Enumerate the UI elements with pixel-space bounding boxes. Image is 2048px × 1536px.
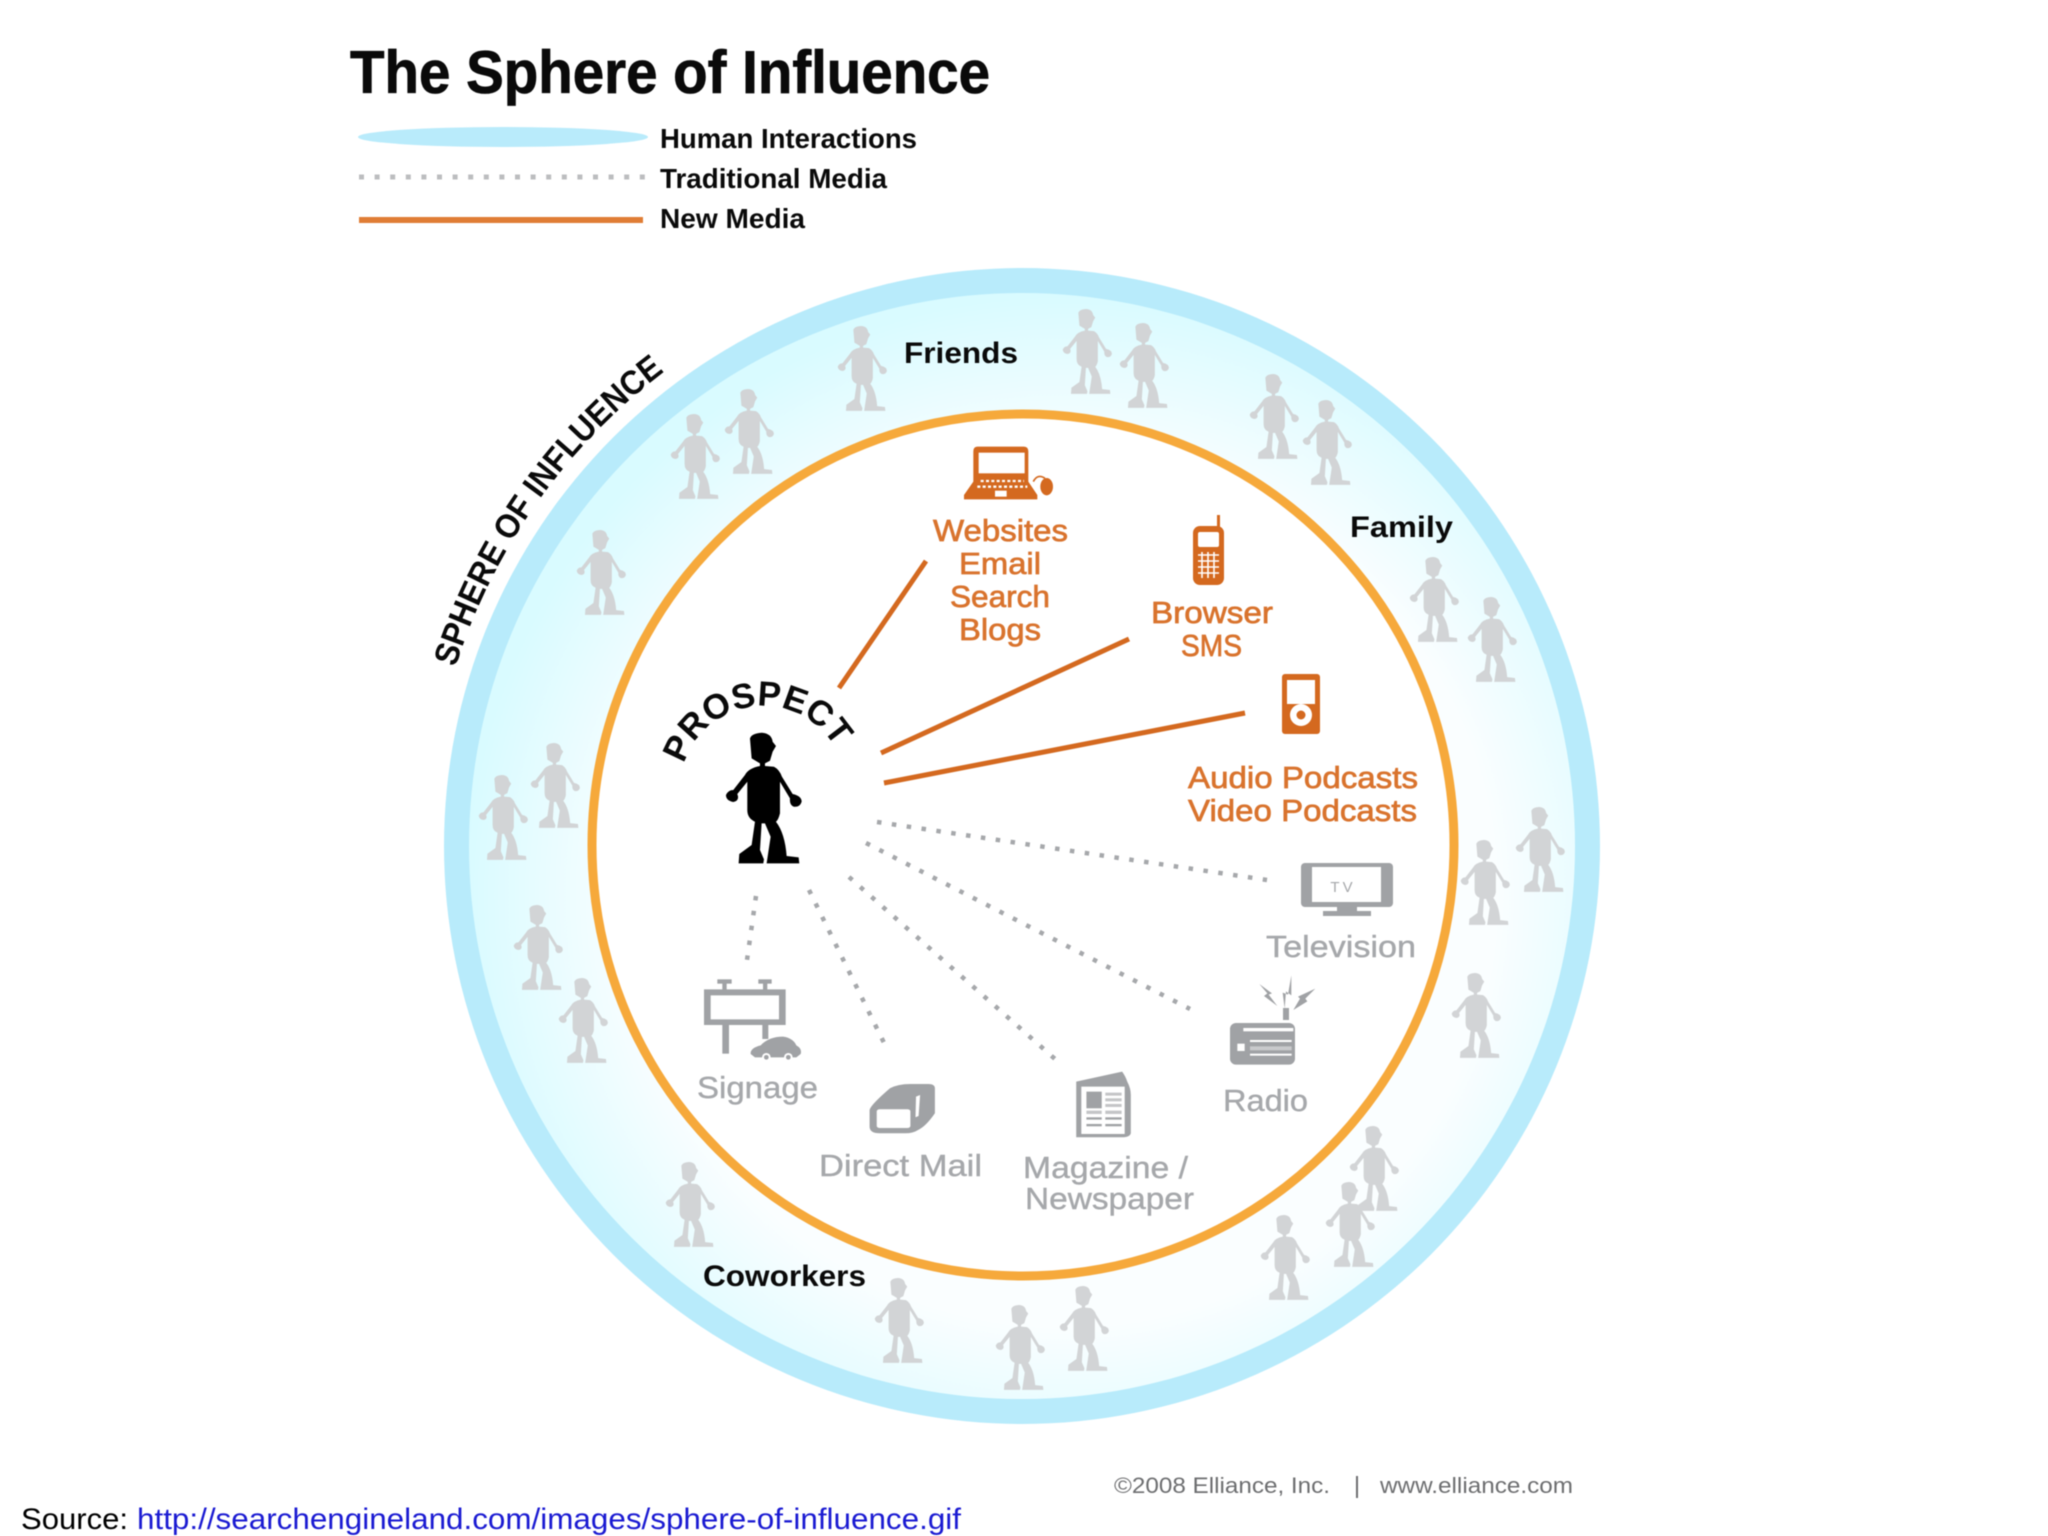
label: coworkers: Coworkers: [703, 1260, 866, 1293]
new media list: audio and video podcasts: [1188, 760, 1418, 828]
traditional media dotted connector lines: [747, 822, 1267, 1059]
new media list: websites, email, search, blogs: Websites: [933, 513, 1068, 548]
icon: radio: [1230, 975, 1315, 1065]
new media list: websites, email, search, blogs: Blogs: [959, 612, 1041, 647]
legend label: human interactions: Human Interactions: [660, 123, 917, 154]
title: The Sphere of Influence: [350, 39, 990, 106]
legend swatch: new media: [359, 217, 643, 223]
new media connector lines: [839, 561, 1245, 783]
new media list: browser, sms: Browser: [1151, 595, 1273, 630]
new media list: websites, email, search, blogs: Search: [950, 579, 1050, 614]
icon: television: [1301, 863, 1393, 916]
new media list: browser, sms: SMS: [1181, 628, 1242, 663]
icon: prospect figure: [726, 733, 802, 863]
legend swatch: traditional media: [359, 174, 646, 180]
people in the sphere: [479, 309, 1565, 1390]
label: signage: Signage: [697, 1070, 818, 1105]
legend label: new media: New Media: [660, 203, 805, 234]
label: magazine / newspaper: Newspaper: [1025, 1181, 1194, 1216]
new media list: websites, email, search, blogs: Email: [959, 546, 1041, 581]
icon: television: TV: [1330, 879, 1356, 896]
legend: [358, 123, 917, 234]
curved label: sphere of influence: SPHERE OF INFLUENCE: [434, 354, 664, 666]
icon: audio player: [1282, 674, 1320, 734]
label: magazine / newspaper: Magazine /: [1023, 1150, 1188, 1185]
legend label: traditional media: Traditional Media: [660, 163, 887, 194]
new media list: websites, email, search, blogs: [933, 513, 1068, 647]
icon: magazine and newspaper: [1076, 1072, 1131, 1137]
copyright footer: [1114, 1473, 1573, 1498]
human interactions disc: [469, 293, 1575, 1399]
icon: laptop: [964, 447, 1053, 499]
label: friends: Friends: [904, 337, 1018, 370]
label: direct mail: Direct Mail: [819, 1148, 982, 1183]
legend swatch: human interactions: [358, 127, 648, 147]
icon: direct mail: [870, 1084, 935, 1133]
new media list: audio and video podcasts: Audio Podcasts: [1188, 760, 1418, 795]
media circle with orange ring: [592, 414, 1454, 1276]
icon: signage with car: [704, 979, 801, 1062]
label: television: Television: [1266, 929, 1416, 964]
label: magazine / newspaper: [1023, 1150, 1194, 1216]
curved label: prospect: PROSPECT: [662, 680, 856, 762]
copyright footer: ©2008 Elliance, Inc.: [1114, 1473, 1330, 1498]
source line: http://searchengineland.com/images/sphere-of-influence.gif: [137, 1503, 962, 1536]
new media list: browser, sms: [1151, 595, 1273, 663]
label: radio: Radio: [1223, 1083, 1308, 1118]
prospect: [662, 680, 856, 864]
source line: Source:: [21, 1503, 128, 1536]
new media list: audio and video podcasts: Video Podcasts: [1188, 793, 1417, 828]
icon: mobile phone: [1193, 515, 1224, 585]
copyright footer: www.elliance.com: [1379, 1473, 1573, 1498]
sphere of influence outer band: [444, 268, 1600, 1424]
label: family: Family: [1350, 511, 1453, 544]
